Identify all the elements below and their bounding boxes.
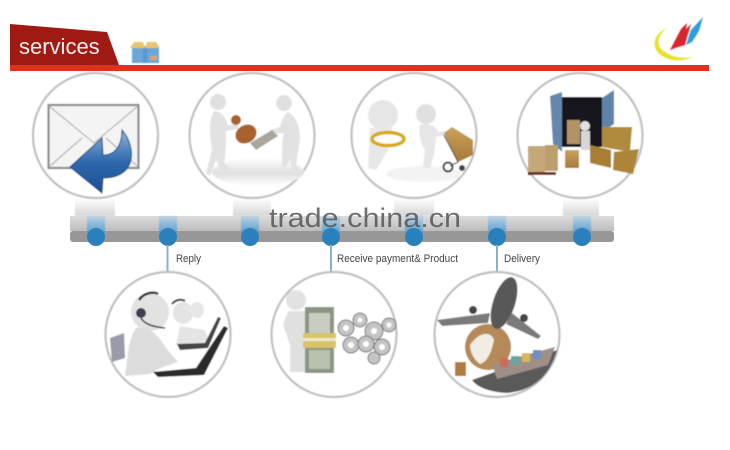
label: Reply: Reply: [176, 253, 201, 265]
circle: email reply: [33, 73, 158, 198]
shadows below top circles: [75, 198, 599, 216]
circle: customer service operators: [106, 272, 230, 397]
timeline nodes: [87, 228, 591, 246]
timeline: [70, 198, 614, 272]
header rule: [10, 65, 709, 71]
circle: inspecting goods: [352, 73, 476, 198]
circle: payment and product: [272, 272, 396, 397]
watermark: trade.china.cn: trade.china.cn: [269, 203, 461, 233]
circle: handshake deal: [190, 73, 314, 198]
icon: parcel box: [130, 42, 160, 63]
label: Delivery: Delivery: [504, 253, 540, 265]
timeline upper band: [70, 216, 614, 231]
icon: company logo: [655, 17, 703, 60]
timeline bar: [70, 231, 614, 242]
header banner: services: [10, 24, 119, 65]
blue stripes: [87, 216, 591, 232]
connector stems: [166, 245, 498, 272]
circle: air and sea delivery: [434, 272, 560, 397]
header banner: services: services: [19, 34, 100, 59]
label: Receive payment & Product: Receive payment& Product: [337, 253, 458, 265]
circle: container loading: [518, 73, 642, 198]
